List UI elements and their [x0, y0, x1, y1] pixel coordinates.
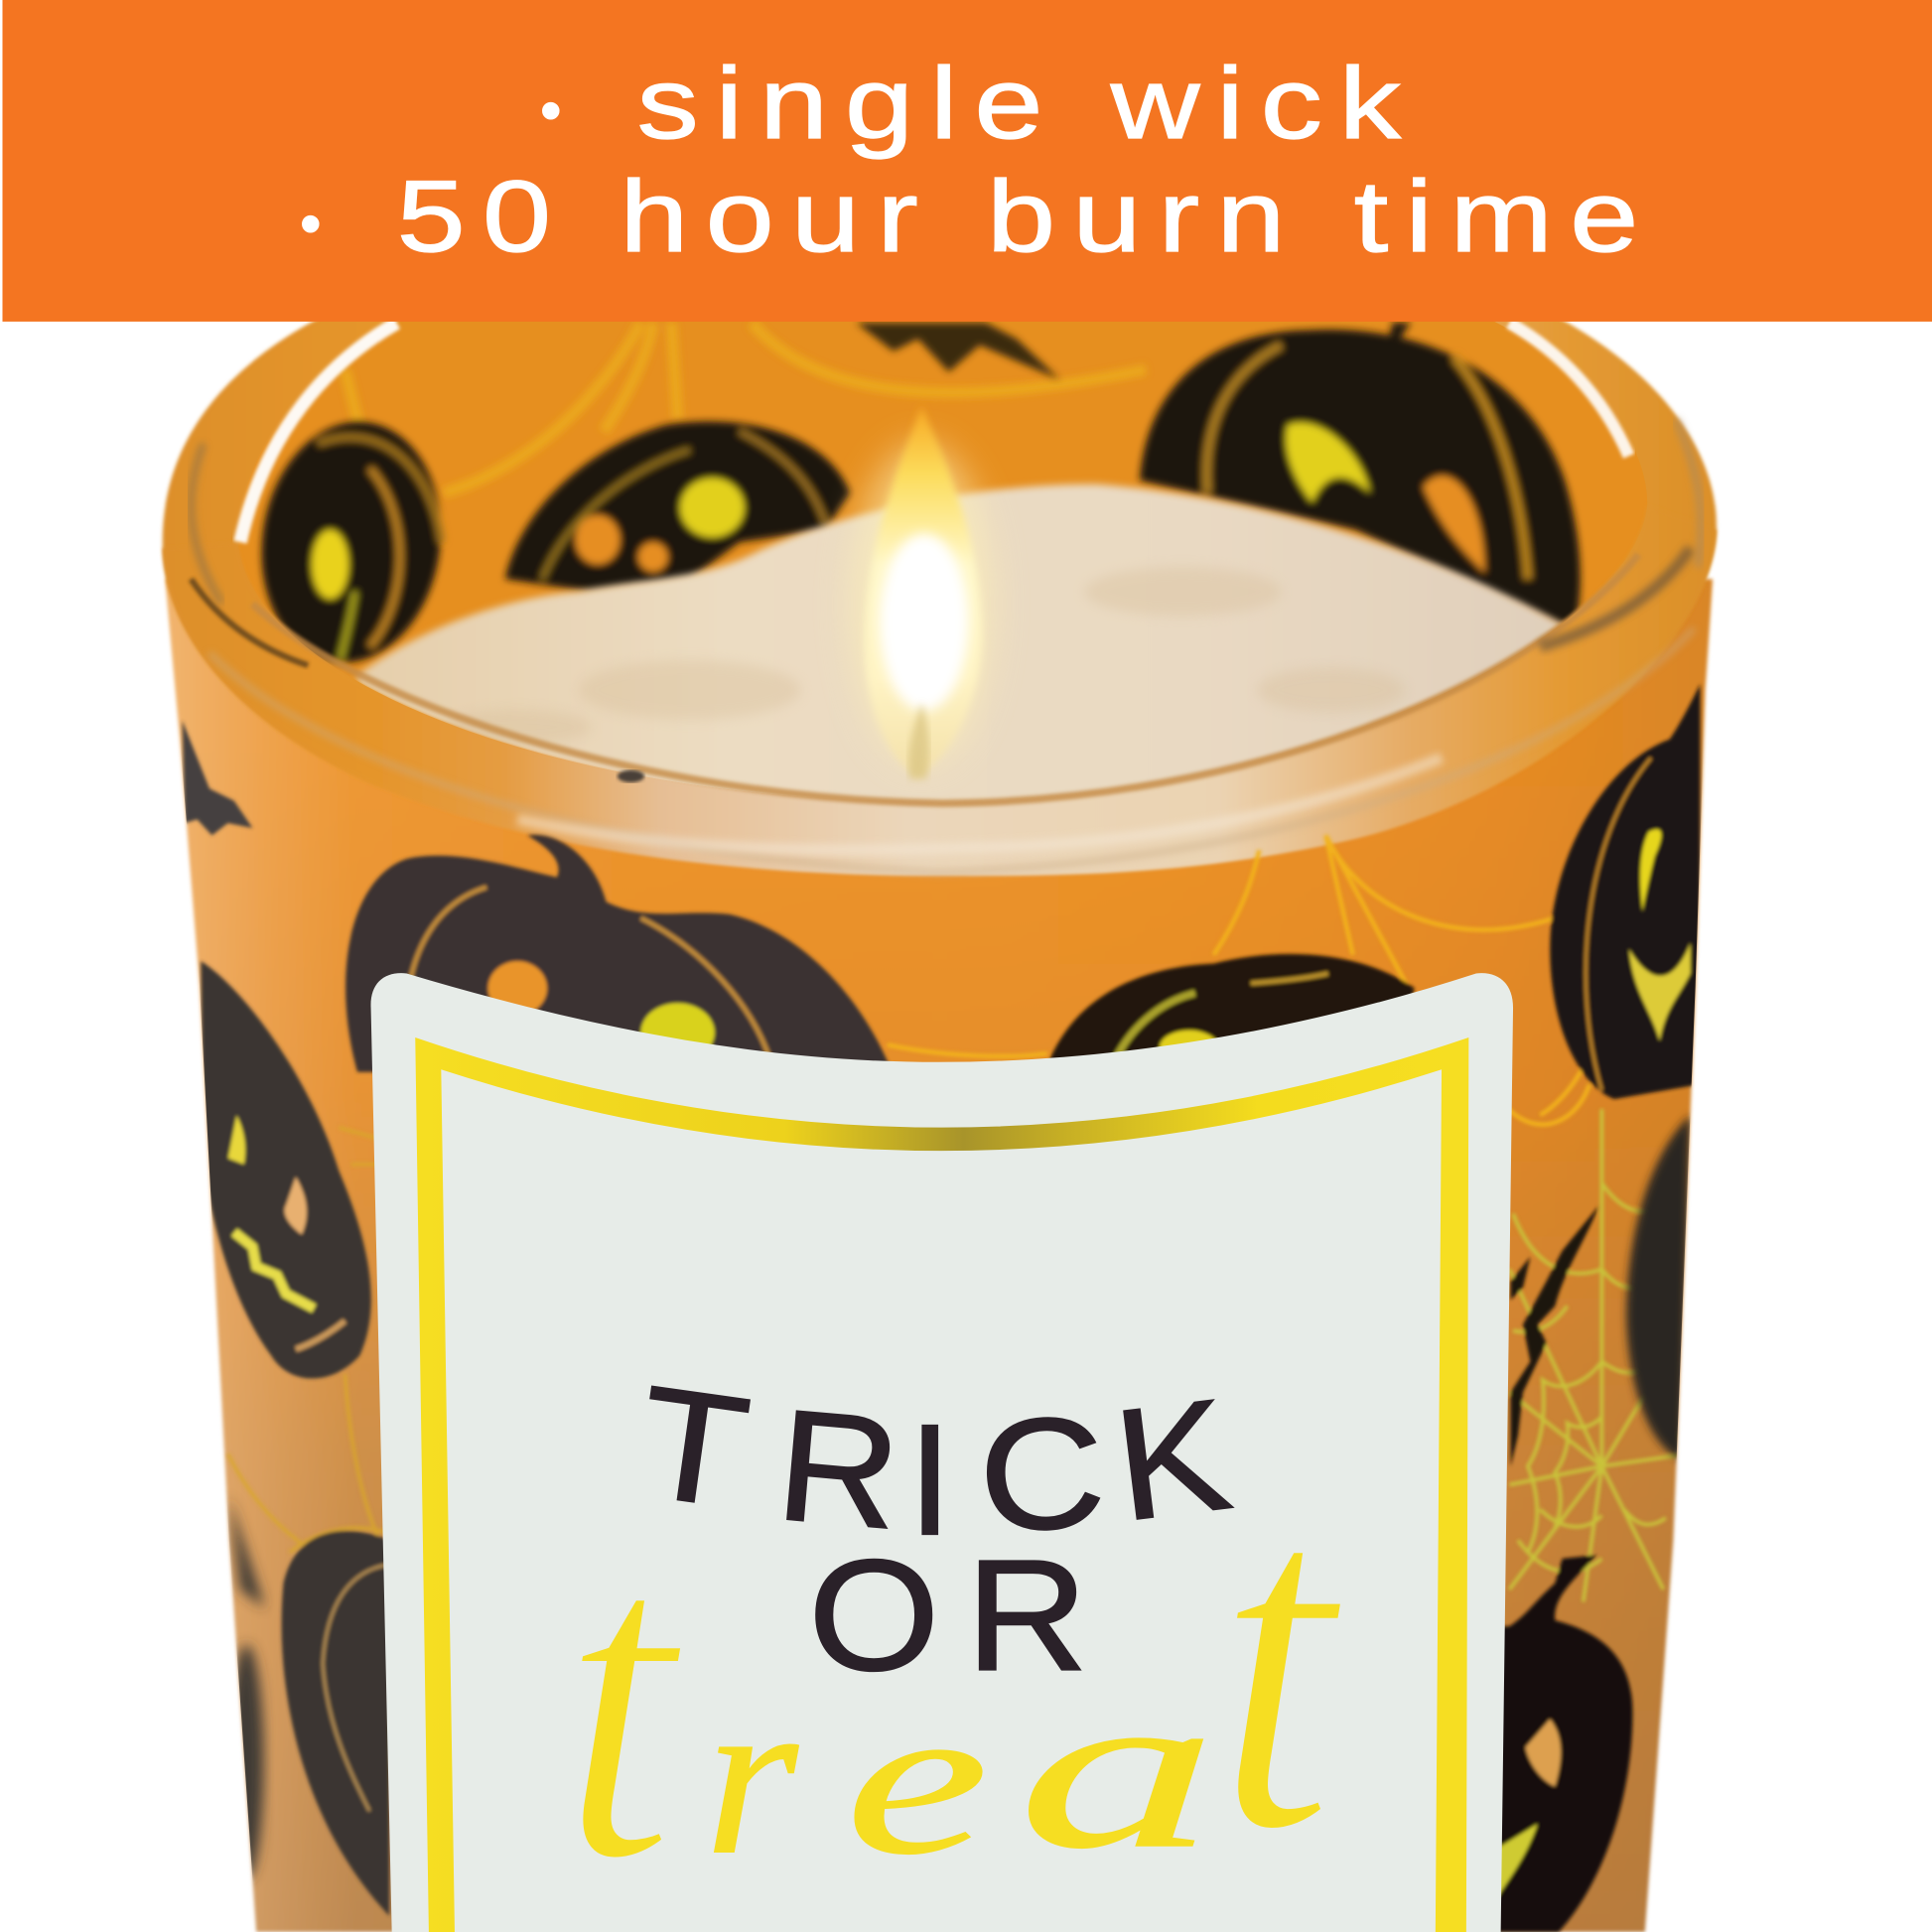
top left glass highlight: [240, 323, 397, 542]
orange banner: [2, 0, 1932, 322]
web near rim: [888, 835, 1595, 1125]
label word: TRICK: [628, 1353, 1238, 1568]
glass rim front: [163, 323, 1717, 875]
label word: TRICK: T: [628, 1353, 758, 1542]
pumpkin left upper: [201, 961, 371, 1378]
label word: TRICK: I: [908, 1391, 952, 1568]
web on lower left: [228, 1128, 392, 1578]
interior bat: [857, 323, 1059, 379]
right rim reflections: [1540, 548, 1691, 647]
pumpkin front centre: [1044, 954, 1415, 1072]
label word: OR: OR: [808, 1527, 1114, 1703]
wax surface: [352, 479, 1564, 801]
bat upper left: [183, 721, 252, 835]
label word: treat: a: [1018, 1642, 1217, 1895]
jar print: pumpkins, bats and webs: [183, 684, 1701, 1932]
interior webs: [345, 323, 1146, 492]
feature: 50 hour burn time: 50 hour burn time: [397, 161, 1638, 274]
top right glass highlight: [1509, 323, 1629, 456]
bullet: single wick: •: [539, 74, 562, 146]
label word: treat: t: [1215, 1389, 1350, 1932]
rim outer grey line: [209, 628, 1694, 873]
rim inner edge line: [252, 554, 1639, 803]
pumpkin front left: [345, 835, 893, 1072]
label sheet: [370, 973, 1513, 1932]
spider web right: [1509, 1109, 1688, 1601]
pumpkin right top: [1550, 684, 1701, 1099]
jar interior back wall: [239, 322, 1647, 798]
wax mottling: [444, 567, 1405, 745]
interior pumpkin left: [256, 415, 449, 667]
pumpkin right lower: [1497, 1555, 1632, 1932]
label word: TRICK: K: [1106, 1365, 1238, 1554]
feature: single wick: single wick: [637, 48, 1401, 160]
jar body: [165, 579, 1713, 1932]
bullet: 50 hour burn time: •: [299, 188, 322, 259]
bat on web: [1511, 1205, 1599, 1466]
gold frame: [415, 1037, 1468, 1932]
label word: TRICK: C: [975, 1384, 1109, 1566]
pumpkin right middle: [1626, 1115, 1691, 1460]
rim dark spot: [618, 770, 644, 782]
flame: [850, 407, 993, 778]
rim highlight: [517, 758, 1442, 850]
label word: treat: e: [845, 1660, 989, 1898]
label word: treat: [561, 1389, 1350, 1932]
label word: TRICK: R: [770, 1376, 906, 1562]
far left pumpkin shadows: [229, 1497, 265, 1879]
candle jar: [163, 221, 1717, 1932]
product label: [370, 973, 1513, 1932]
left rim reflections: [191, 579, 308, 665]
glass rim outer: [163, 308, 1717, 875]
label word: treat: r: [705, 1649, 799, 1901]
interior pumpkin right: [1140, 323, 1581, 630]
pumpkin left lower: [282, 1531, 389, 1916]
interior pumpkin middle: [505, 422, 850, 592]
